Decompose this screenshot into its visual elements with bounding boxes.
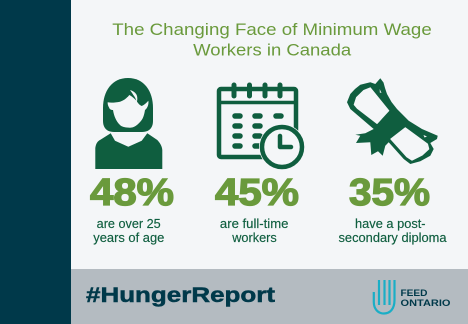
caption: over 25: are over 25 xyxy=(97,217,161,231)
caption: over 25 xyxy=(93,217,164,245)
caption: diploma: secondary diploma xyxy=(338,231,447,245)
hashtag: #HungerReport xyxy=(86,283,275,307)
caption: diploma xyxy=(338,217,447,245)
icon: diploma scroll xyxy=(347,78,438,164)
caption: full-time: workers xyxy=(231,231,277,245)
icon: woman xyxy=(95,78,162,169)
caption: diploma: have a post- xyxy=(355,217,426,231)
stat: 45%: 45% xyxy=(215,172,299,214)
stat: 35%: 35% xyxy=(349,172,430,214)
title: The Changing Face of Minimum Wage xyxy=(112,21,432,39)
panel: footer bar xyxy=(71,269,468,324)
panel: left sidebar xyxy=(0,0,71,324)
icon: calendar with clock xyxy=(219,85,305,170)
caption: full-time xyxy=(220,217,288,245)
stat: 48%: 48% xyxy=(90,172,174,214)
logo wordmark xyxy=(400,288,450,309)
caption: over 25: years of age xyxy=(93,231,164,245)
title xyxy=(112,21,432,60)
caption: full-time: are full-time xyxy=(220,217,288,231)
logo wordmark: FEED xyxy=(400,288,428,299)
title: Workers in Canada xyxy=(193,42,352,60)
icon: hand xyxy=(374,280,394,314)
logo: Feed Ontario xyxy=(374,280,450,314)
logo wordmark: ONTARIO xyxy=(400,298,450,309)
